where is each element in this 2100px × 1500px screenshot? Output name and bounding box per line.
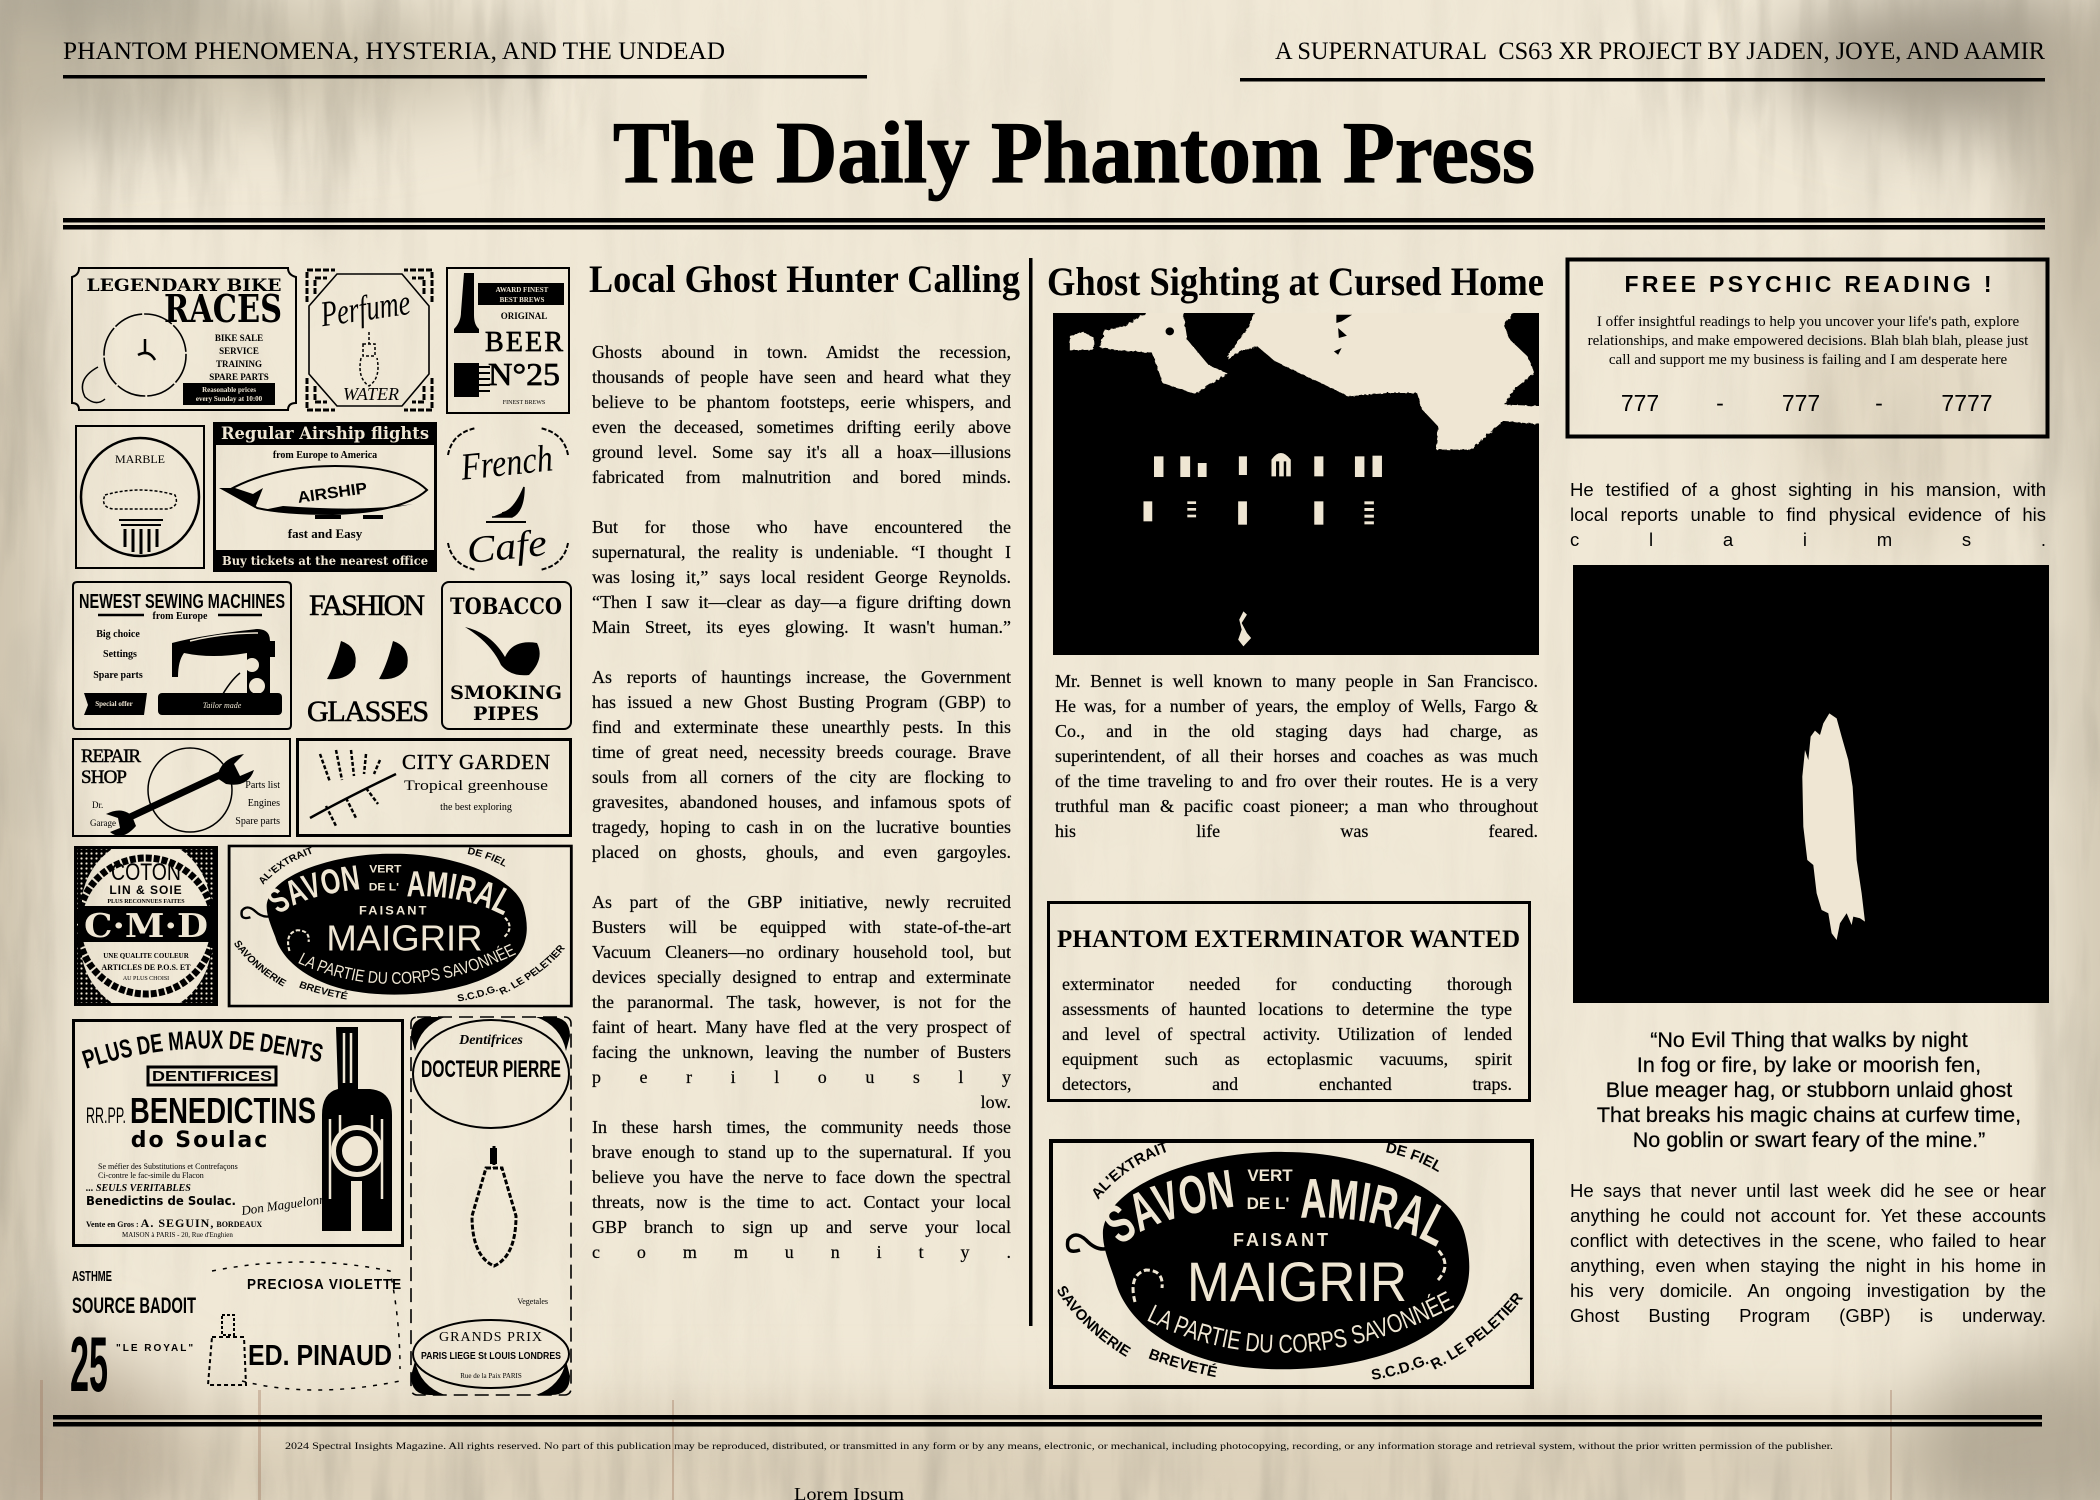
ad: savon amiral small: DE L' — [369, 882, 399, 894]
ad: marble: MARBLE — [115, 452, 165, 466]
testimony paragraph: He testified of a ghost sighting in his mansion, with — [1570, 479, 2046, 500]
poem quotation: No goblin or swart feary of the mine.” — [1633, 1128, 1985, 1152]
ad: coton lin et soie: UNE QUALITE COULEUR — [103, 952, 190, 960]
ad: legendary bike races: every Sunday at 10:00 — [196, 395, 263, 403]
ad: french cafe — [448, 428, 568, 572]
ad: city garden: CITY GARDEN — [402, 750, 550, 774]
ad: source badoit and ed pinaud: "LE ROYAL" — [116, 1343, 195, 1354]
masthead title: The Daily Phantom Press — [613, 105, 1535, 202]
article: local ghost hunter calling body: GBP branch to sign up and serve your local — [592, 1217, 1011, 1237]
article: local ghost hunter calling body: devices specially designed to entrap and exterminate — [592, 967, 1011, 987]
psychic phone number: 777 — [1621, 390, 1659, 416]
ad: coton lin et soie — [76, 848, 216, 1004]
article: local ghost hunter calling body: But for those who have encountered the — [592, 517, 1011, 537]
ad: legendary bike races: SERVICE — [219, 346, 259, 356]
psychic phone number: - — [1875, 390, 1883, 416]
poem quotation: That breaks his magic chains at curfew time, — [1597, 1103, 2021, 1127]
ad: regular airship flights: fast and Easy — [288, 526, 363, 541]
article: local ghost hunter calling body: Vacuum Cleaners—no ordinary household tool, but — [592, 942, 1011, 962]
ad: legendary bike races — [72, 268, 296, 410]
ad: savon amiral small — [229, 846, 571, 1006]
ad: newest sewing machines: Special offer — [95, 700, 133, 708]
poem quotation: In fog or fire, by lake or moorish fen, — [1637, 1053, 1981, 1077]
psychic phone number: - — [1716, 390, 1724, 416]
psychic body text: I offer insightful readings to help you uncover your life's path, explore — [1597, 314, 2019, 330]
closing paragraph: his very domicile. An ongoing investigation by the — [1570, 1280, 2046, 1301]
ad: coton lin et soie: AU PLUS CHOISI — [123, 976, 169, 982]
testimony paragraph: local reports unable to find physical evidence of his — [1570, 504, 2046, 525]
header right text: A SUPERNATURAL CS63 XR PROJECT BY JADEN, JOYE, AND AAMIR — [1275, 38, 2045, 65]
ad: legendary bike races: BIKE SALE — [215, 333, 263, 343]
article: local ghost hunter calling body: low. — [981, 1092, 1011, 1112]
article: local ghost hunter calling body: believe to be phantom footsteps, eerie whispers, and — [592, 392, 1011, 412]
article: local ghost hunter calling body: find and exterminate these unearthly pests. In this — [592, 717, 1011, 737]
ad: newest sewing machines — [73, 582, 291, 729]
ad: beer no 25: BEST BREWS — [500, 296, 545, 304]
article: local ghost hunter calling body: As reports of hauntings increase, the Government — [592, 667, 1011, 687]
article: local ghost hunter calling body: even the deceased, sometimes drifting eerily above — [592, 417, 1011, 437]
exterminator body text: and level of spectral activity. Utilization of lended — [1062, 1024, 1512, 1044]
ad: source badoit and ed pinaud: SOURCE BADOIT — [72, 1293, 196, 1318]
ad: savon amiral large: MAIGRIR — [1187, 1250, 1407, 1313]
heading: ghost sighting at cursed home: Ghost Sighting at Cursed Home — [1047, 259, 1544, 304]
ad: plus de maux de dents: PLUS DE MAUX DE DENTS — [82, 1030, 323, 1068]
psychic reading box — [1568, 260, 2048, 436]
ad: newest sewing machines: NEWEST SEWING MACHINES — [79, 591, 285, 613]
article: local ghost hunter calling body: In these harsh times, the community needs those — [592, 1117, 1011, 1137]
header right rule — [1240, 78, 2045, 82]
ad: fashion glasses — [307, 589, 429, 728]
testimony paragraph — [1570, 477, 2046, 553]
ad: fashion glasses: FASHION — [309, 589, 425, 622]
article: mansion story body: He was, for a number of years, the employ of Wells, Fargo & — [1055, 696, 1538, 716]
article: local ghost hunter calling body: As part of the GBP initiative, newly recruited — [592, 892, 1011, 912]
ad: plus de maux de dents: do Soulac — [131, 1128, 269, 1153]
ad: tobacco smoking pipes: TOBACCO — [450, 594, 562, 620]
closing paragraph: He says that never until last week did he see or hear — [1570, 1180, 2046, 1201]
article: local ghost hunter calling body: time of great need, necessity breeds courage. Brave — [592, 742, 1011, 762]
article: local ghost hunter calling body: souls from all corners of the city are flocking to — [592, 767, 1011, 787]
ad: newest sewing machines: Tailor made — [203, 701, 242, 710]
psychic heading: FREE PSYCHIC READING ! — [1624, 271, 1992, 297]
article: mansion story body: Co., and in the old staging days had charge, as — [1055, 721, 1538, 741]
ad: savon amiral small: SAVON — [268, 865, 360, 912]
psychic phone number: 7777 — [1941, 390, 1993, 416]
article: local ghost hunter calling body: believe you have the nerve to face down the spectral — [592, 1167, 1011, 1187]
exterminator body text — [1062, 972, 1512, 1097]
ad: savon amiral large: SAVON — [1106, 1170, 1234, 1242]
ad: source badoit and ed pinaud — [70, 1262, 402, 1408]
article: mansion story body: Mr. Bennet is well known to many people in San Francisco. — [1055, 671, 1538, 691]
poem quotation — [1570, 1028, 2048, 1153]
ad: coton lin et soie: ARTICLES DE P.O.S. ET — [101, 963, 191, 972]
ad: repair shop: Engines — [248, 798, 280, 809]
ad: savon amiral small: SAVONNERIE — [234, 940, 287, 986]
poem quotation: “No Evil Thing that walks by night — [1650, 1028, 1968, 1052]
ad: tobacco smoking pipes: PIPES — [473, 703, 539, 725]
ad: source badoit and ed pinaud: ED. PINAUD — [248, 1340, 392, 1372]
psychic body text — [1575, 313, 2041, 370]
article: local ghost hunter calling body: c o m m u n i t y . — [592, 1242, 1011, 1262]
article: local ghost hunter calling body: Ghosts abound in town. Amidst the recession, — [592, 342, 1011, 362]
article: local ghost hunter calling body: was losing it,” says local resident George Reynolds. — [592, 567, 1011, 587]
header left text: PHANTOM PHENOMENA, HYSTERIA, AND THE UNDEAD — [63, 38, 725, 65]
ad: beer no 25: BEER — [485, 327, 563, 358]
ad: savon amiral large: AMIRAL — [1301, 1179, 1442, 1247]
ad: plus de maux de dents: MAISON à PARIS - 20, Rue d'Enghien — [122, 1231, 233, 1239]
ad: regular airship flights: from Europe to America — [273, 450, 377, 461]
closing paragraph: conflict with detectives in the scene, who failed to hear — [1570, 1230, 2046, 1251]
ad: docteur pierre dentifrices: Rue de la Paix PARIS — [460, 1372, 522, 1380]
ad: savon amiral large: AL'EXTRAIT — [1088, 1139, 1171, 1203]
article: local ghost hunter calling body: thousands of people have seen and heard what they — [592, 367, 1011, 387]
article: local ghost hunter calling body: ground level. Some say it's all a hoax—illusions — [592, 442, 1011, 462]
ad: savon amiral large: DE L' — [1247, 1194, 1289, 1213]
ad: savon amiral small: AMIRAL — [407, 871, 507, 916]
ad: perfume: Perfume — [317, 282, 413, 334]
article: local ghost hunter calling body: tragedy, hoping to cash in on the lucrative bounties — [592, 817, 1011, 837]
ad: savon amiral small: S.C.D.G. — [458, 986, 498, 1002]
ad: repair shop: REPAIR — [81, 746, 141, 767]
ad: docteur pierre dentifrices — [411, 1017, 571, 1395]
ad: coton lin et soie: PLUS RECONNUES FAITES — [107, 899, 185, 905]
article: mansion story body: superintendent, of all their horses and coaches as was much — [1055, 746, 1538, 766]
footer copyright: 2024 Spectral Insights Magazine. All rights reserved. No part of this publication may be reproduced, distributed, or transmitted in any form or by any means, electronic, or mechanical, including photocopying, recording, or any information storage and retrieval system, without the prior written permission of the publisher. — [285, 1441, 1833, 1452]
ad: repair shop — [73, 739, 290, 836]
ad: savon amiral large: BREVETÉ — [1146, 1346, 1219, 1381]
ad: repair shop: Dr. — [92, 800, 103, 810]
article: local ghost hunter calling body: Main Street, its eyes glowing. It wasn't human.” — [592, 617, 1011, 637]
ad: beer no 25 — [447, 268, 569, 413]
ad: newest sewing machines: Big choice — [96, 629, 140, 640]
ad: docteur pierre dentifrices: GRANDS PRIX — [439, 1330, 543, 1345]
ad: plus de maux de dents: Benedictins de Soulac. — [86, 1194, 236, 1208]
ad: coton lin et soie: C·M·D — [84, 906, 208, 945]
ad: plus de maux de dents — [74, 1020, 402, 1246]
article: local ghost hunter calling body: the paranormal. The task, however, is not for the — [592, 992, 1011, 1012]
ad: beer no 25: N°25 — [488, 356, 560, 392]
ad: plus de maux de dents: BENEDICTINS — [130, 1090, 316, 1131]
article: local ghost hunter calling body: facing the unknown, leaving the number of Busters — [592, 1042, 1011, 1062]
ad: source badoit and ed pinaud: ASTHME — [72, 1268, 112, 1285]
article: local ghost hunter calling body: threats, now is the time to act. Contact your local — [592, 1192, 1011, 1212]
article: local ghost hunter calling body: has issued a new Ghost Busting Program (GBP) to — [592, 692, 1011, 712]
ad: legendary bike races: LEGENDARY BIKE — [86, 276, 282, 296]
ad: savon amiral large — [1051, 1139, 1532, 1387]
article: local ghost hunter calling body: “Then I saw it—clear as day—a figure drifting down — [592, 592, 1011, 612]
ad: legendary bike races: TRAINING — [216, 359, 262, 369]
poem quotation: Blue meager hag, or stubborn unlaid ghost — [1606, 1078, 2012, 1102]
article: local ghost hunter calling body — [592, 340, 1011, 1260]
heading: local ghost hunter calling: Local Ghost Hunter Calling — [589, 258, 1020, 301]
ad: source badoit and ed pinaud: 25 — [70, 1320, 108, 1408]
ad: regular airship flights: Buy tickets at the nearest office — [222, 554, 428, 568]
ad: regular airship flights: Regular Airship flights — [221, 424, 429, 444]
ad: plus de maux de dents: Ci-contre le fac-simile du Flacon — [98, 1171, 204, 1180]
exterminator heading: PHANTOM EXTERMINATOR WANTED — [1057, 926, 1520, 953]
article: mansion story body: truthful man & pacific coast pioneer; a man who throughout — [1055, 796, 1538, 816]
ad: source badoit and ed pinaud: PRECIOSA VIOLETTE — [247, 1276, 402, 1293]
ad: savon amiral small: R. LE PELETIER — [498, 945, 565, 995]
article: local ghost hunter calling body: brave enough to stand up to the supernatural. If you — [592, 1142, 1011, 1162]
ad: savon amiral small: VERT — [369, 864, 401, 875]
ad: docteur pierre dentifrices: Vegetales — [517, 1297, 548, 1306]
ad: beer no 25: AWARD FINEST — [496, 286, 549, 294]
ad: plus de maux de dents: ... SEULS VERITABLES — [86, 1183, 191, 1194]
ad: savon amiral large: S.C.D.G. — [1370, 1351, 1431, 1384]
article: local ghost hunter calling body: fabricated from malnutrition and bored minds. — [592, 467, 1011, 487]
closing paragraph: anything, even when staying the night in his home in — [1570, 1255, 2046, 1276]
ad: regular airship flights: AIRSHIP — [297, 480, 369, 507]
article: local ghost hunter calling body: faint of heart. Many have fled at the very prospect of — [592, 1017, 1011, 1037]
ad: plus de maux de dents: Vente en Gros : A. SEGUIN, BORDEAUX — [86, 1216, 262, 1230]
ad: savon amiral large: LA PARTIE DU CORPS SAVONNÉE — [1143, 1285, 1458, 1359]
ad: docteur pierre dentifrices: PARIS LIEGE St LOUIS LONDRES — [421, 1351, 561, 1362]
ad: repair shop: Parts list — [245, 780, 280, 791]
closing paragraph — [1570, 1178, 2046, 1328]
ad: city garden: the best exploring — [440, 802, 512, 813]
exterminator body text: equipment such as ectoplasmic vacuums, spirit — [1062, 1049, 1512, 1069]
article: local ghost hunter calling body: p e r i l o u s l y — [592, 1067, 1011, 1087]
ad: newest sewing machines: Settings — [103, 649, 137, 660]
article: local ghost hunter calling body: placed on ghosts, ghouls, and even gargoyles. — [592, 842, 1011, 862]
article: mansion story body: of the time traveling to and fro over their routes. He is a very — [1055, 771, 1538, 791]
ad: legendary bike races: Reasonable prices — [202, 386, 256, 394]
footer double rule — [53, 1415, 2042, 1426]
ad: city garden — [298, 740, 570, 836]
ad: regular airship flights — [214, 423, 436, 571]
ad: coton lin et soie: LIN & SOIE — [109, 883, 183, 897]
closing paragraph: Ghost Busting Program (GBP) is underway. — [1570, 1305, 2046, 1326]
ad: savon amiral small: MAIGRIR — [326, 919, 483, 959]
ad: beer no 25: ORIGINAL — [501, 311, 547, 321]
ad: tobacco smoking pipes — [442, 582, 571, 729]
psychic body text: relationships, and make empowered decisions. Blah blah blah, please just — [1588, 333, 2028, 349]
article: local ghost hunter calling body: gravesites, abandoned houses, and infamous spots of — [592, 792, 1011, 812]
ad: legendary bike races: SPARE PARTS — [209, 372, 269, 382]
ad: savon amiral small: FAISANT — [359, 904, 429, 918]
ad: savon amiral small: BREVETÉ — [299, 981, 348, 1000]
ad: repair shop: Spare parts — [235, 816, 280, 827]
ad: repair shop: SHOP — [81, 767, 127, 788]
header left rule — [63, 75, 867, 78]
ad: beer no 25: FINEST BREWS — [503, 400, 545, 406]
ad: savon amiral large: R. LE PELETIER — [1428, 1289, 1527, 1374]
article: mansion story body — [1055, 669, 1538, 844]
ad: coton lin et soie: COTON — [111, 859, 181, 886]
ad: plus de maux de dents: Se méfier des Substitutions et Contrefaçons — [98, 1162, 238, 1171]
psychic phone number — [1621, 390, 1993, 416]
ad: savon amiral large: FAISANT — [1233, 1230, 1331, 1250]
ad: savon amiral small: AL'EXTRAIT — [260, 847, 312, 885]
exterminator box — [1048, 902, 1530, 1100]
ad: plus de maux de dents: Don Maguelonne — [239, 1190, 332, 1218]
psychic phone number: 777 — [1782, 390, 1820, 416]
ad: docteur pierre dentifrices: Dentifrices — [458, 1033, 523, 1048]
article: mansion story body: his life was feared. — [1055, 821, 1538, 841]
article: local ghost hunter calling body: supernatural, the reality is undeniable. “I thought I — [592, 542, 1011, 562]
exterminator body text: detectors, and enchanted traps. — [1062, 1074, 1512, 1094]
testimony paragraph: c l a i m s . — [1570, 529, 2046, 550]
photo: ghost apparition — [1573, 565, 2049, 1003]
ad: legendary bike races: RACES — [164, 286, 282, 331]
ad: french cafe: Cafe — [465, 522, 549, 572]
column divider — [1029, 258, 1032, 1326]
ad: savon amiral small: LA PARTIE DU CORPS SAVONNÉE — [298, 944, 516, 984]
article: local ghost hunter calling body: Busters will be equipped with state-of-the-art — [592, 917, 1011, 937]
ad: plus de maux de dents: RR.PP. — [86, 1103, 126, 1128]
ad: perfume — [307, 270, 432, 410]
photo: haunted mansion — [1053, 293, 1549, 655]
closing paragraph: anything he could not account for. Yet these accounts — [1570, 1205, 2046, 1226]
ad: savon amiral small: DE FIEL — [468, 847, 506, 867]
ad: city garden: Tropical greenhouse — [404, 778, 548, 794]
ad: docteur pierre dentifrices: DOCTEUR PIERRE — [421, 1056, 561, 1083]
ad: perfume: WATER — [343, 384, 399, 404]
ad: savon amiral large: VERT — [1247, 1166, 1293, 1185]
ad: newest sewing machines: from Europe — [153, 611, 208, 622]
ad: french cafe: French — [458, 437, 555, 489]
ad: fashion glasses: GLASSES — [307, 695, 429, 728]
ad: savon amiral large: DE FIEL — [1384, 1139, 1445, 1176]
exterminator body text: exterminator needed for conducting thorough — [1062, 974, 1512, 994]
psychic body text: call and support me my business is failing and I am desperate here — [1609, 352, 2007, 368]
exterminator body text: assessments of haunted locations to determine the type — [1062, 999, 1512, 1019]
ad: plus de maux de dents: DENTIFRICES — [152, 1068, 272, 1085]
ad: repair shop: Garage — [90, 818, 116, 828]
ad: newest sewing machines: Spare parts — [93, 670, 143, 681]
ad: marble — [76, 426, 204, 568]
masthead double rule — [63, 218, 2045, 230]
ad: savon amiral large: SAVONNERIE — [1053, 1283, 1133, 1361]
ad: tobacco smoking pipes: SMOKING — [450, 682, 562, 704]
